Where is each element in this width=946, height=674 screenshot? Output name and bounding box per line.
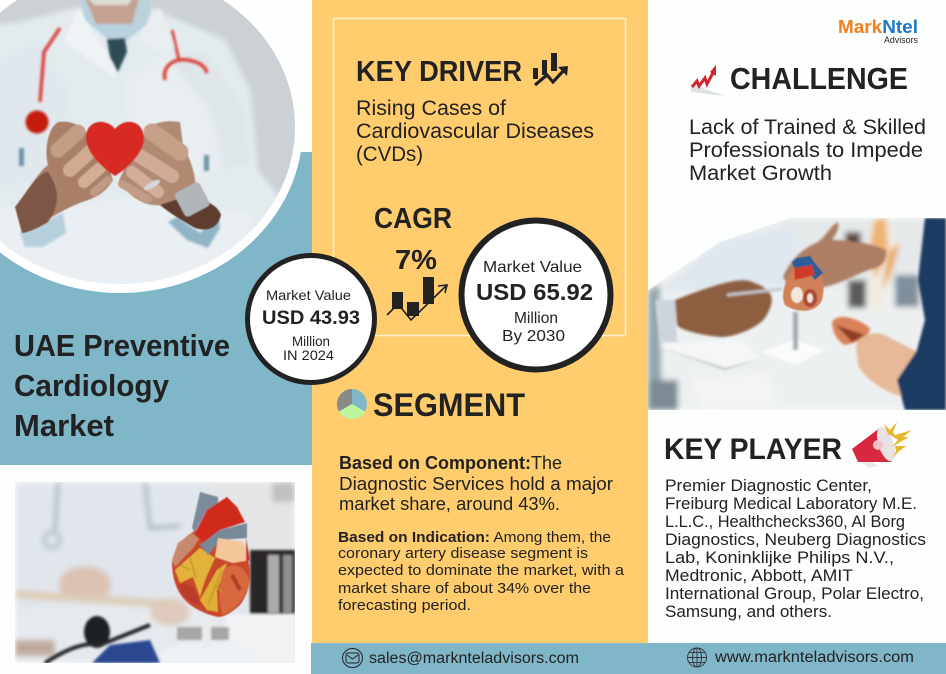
text: email address: sales@marknteladvisors.com [369,650,579,667]
panel: yellow center column [312,0,648,643]
text: key player list: Diagnostics, Neuberg Diagnostics [665,531,926,549]
text: based on component: Diagnostic Services hold a major [339,474,613,494]
text: based on indication: forecasting period. [338,598,471,614]
callout: market value 2024 [248,256,374,382]
panel: footer bar [311,643,946,674]
heading: key driver: KEY DRIVER [356,56,522,88]
callout: market value 2030: By 2030 [502,328,565,345]
heading: UAE Preventive Cardiology Market: UAE Preventive [14,328,230,363]
heading: UAE Preventive Cardiology Market: Market [14,408,114,443]
panel: key driver frame [334,18,626,336]
icon: megaphone [852,422,912,468]
text: based on indication: coronary artery disease segment is [338,546,588,562]
text: key player list [665,477,926,621]
text: based on indication: expected to dominate the market, with a [338,563,625,579]
text: based on component [339,453,613,514]
text: website: www.marknteladvisors.com [714,649,914,666]
text: key player list: Samsung, and others. [665,603,832,621]
photo: doctor explaining heart model to patient [648,218,946,410]
logo: MarkNtel Advisors: Advisors [884,35,918,45]
heading: challenge: CHALLENGE [730,61,908,96]
callout: market value 2030: Market Value [483,259,582,276]
text: key player list: Freiburg Medical Laboratory M.E. [665,495,917,513]
text: key driver description [356,97,594,166]
text: based on component: market share, around 43%. [339,494,560,514]
text: key driver description: Cardiovascular Diseases [356,120,594,143]
text: key driver description: Rising Cases of [356,97,506,120]
text: based on indication: Based on Indication: Among them, the [338,530,611,546]
callout: market value 2024: IN 2024 [283,348,335,363]
text: key player list: Medtronic, Abbott, AMIT [665,567,853,585]
text: challenge description: Professionals to Impede [689,139,923,162]
text: challenge description: Lack of Trained & Skilled [689,116,926,139]
panel: teal title block [0,152,312,465]
icon: email [342,648,362,668]
icon: challenge red chart arrow [691,65,725,96]
photo: doctor holding red heart [0,0,303,300]
callout: market value 2024: Million [292,334,330,349]
callout: market value 2030: USD 65.92 [476,279,593,305]
logo: MarkNtel Advisors [838,17,918,45]
text: key driver description: (CVDs) [356,143,423,166]
heading: key player: KEY PLAYER [664,433,842,466]
text: key player list: International Group, Polar Electro, [665,585,924,603]
heading: segment: SEGMENT [373,387,525,423]
text: challenge description: Market Growth [689,162,832,185]
text: based on indication [338,530,625,614]
text: CAGR value: 7% [395,244,437,275]
text: challenge description [689,116,926,185]
text: based on indication: market share of about 34% over the [338,581,591,597]
text: key player list: L.L.C., Healthchecks360, Al Borg [665,513,905,531]
icon: growth bars with arrow [387,277,447,320]
heading: UAE Preventive Cardiology Market: Cardiology [14,368,170,403]
text: based on component: Based on Component:The [339,453,562,473]
callout: market value 2024: USD 43.93 [262,308,360,329]
text: CAGR label: CAGR [374,203,452,235]
icon: key driver chart [533,53,568,85]
photo: anatomical heart model on desk [15,482,295,670]
callout: market value 2030: Million [514,310,558,327]
logo: MarkNtel Advisors: MarkNtel [838,17,918,37]
text: key player list: Premier Diagnostic Center, [665,477,872,495]
callout: market value 2024: Market Value [266,287,351,303]
heading: UAE Preventive Cardiology Market [14,328,230,443]
icon: segment pie [337,389,367,419]
icon: globe [688,648,706,667]
callout: market value 2030 [462,220,610,370]
text: key player list: Lab, Koninklijke Philips N.V., [665,549,894,567]
